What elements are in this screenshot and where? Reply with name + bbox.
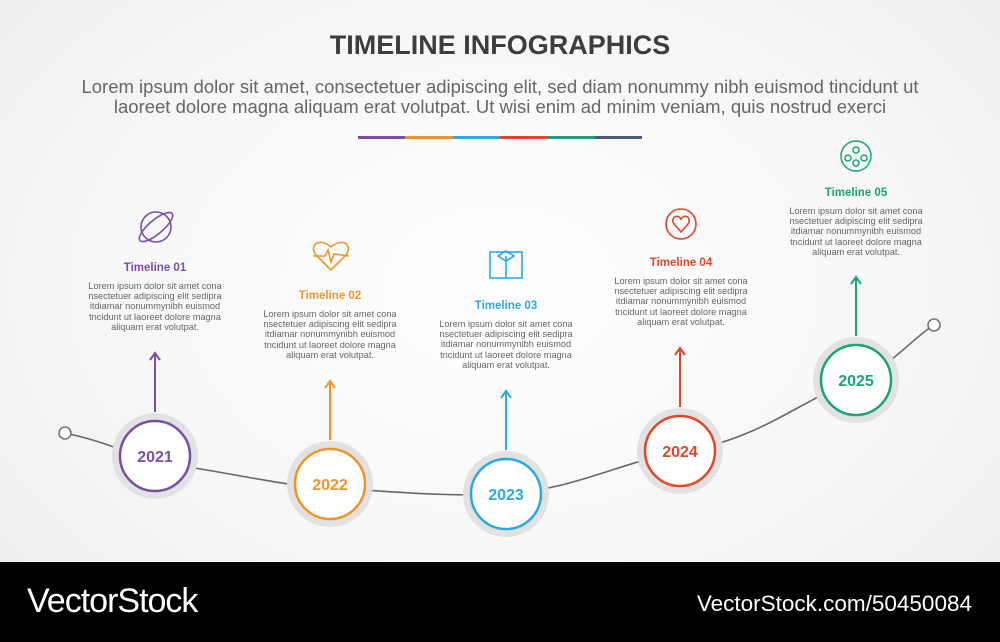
- node 2021: 2021: [137, 449, 173, 466]
- title: TIMELINE INFOGRAPHICS: [330, 30, 670, 60]
- text: timeline 01: [88, 262, 222, 332]
- text: timeline 05: aliquam erat volutpat.: [812, 247, 900, 257]
- text: timeline 01: itdiamar nonummynibh euismod: [90, 301, 220, 311]
- text: timeline 01: Lorem ipsum dolor sit amet cona: [88, 281, 222, 291]
- text: timeline 03: [439, 300, 573, 370]
- node 2021: [112, 353, 198, 499]
- text: timeline 04: Lorem ipsum dolor sit amet cona: [614, 276, 748, 286]
- text: timeline 05: [789, 187, 923, 257]
- text: timeline 03: Lorem ipsum dolor sit amet cona: [439, 319, 573, 329]
- text: timeline 03: nsectetuer adipiscing elit sedipra: [439, 329, 573, 339]
- text: timeline 03: itdiamar nonummynibh euismod: [441, 339, 571, 349]
- icon: heart in circle: [666, 209, 696, 239]
- footer band: VectorStock.com/50450084: [697, 591, 972, 616]
- text: timeline 05: tncidunt ut laoreet dolore magna: [790, 237, 922, 247]
- text: timeline 05: Timeline 05: [825, 187, 887, 199]
- text: timeline 02: nsectetuer adipiscing elit sedipra: [263, 319, 397, 329]
- node 2024: [637, 348, 723, 494]
- text: timeline 03: Timeline 03: [475, 300, 537, 312]
- icon: heart: [313, 242, 349, 270]
- text: timeline 02: aliquam erat volutpat.: [286, 350, 374, 360]
- node 2025: 2025: [838, 373, 874, 390]
- text: timeline 02: Timeline 02: [299, 290, 361, 302]
- color bar: [358, 136, 642, 139]
- text: timeline 04: aliquam erat volutpat.: [637, 317, 725, 327]
- node 2023: 2023: [488, 487, 524, 504]
- text: timeline 02: Lorem ipsum dolor sit amet cona: [263, 309, 397, 319]
- icon: globe: [135, 208, 177, 246]
- subtitle: [81, 76, 919, 117]
- text: timeline 04: [614, 257, 748, 327]
- text: timeline 01: Timeline 01: [124, 262, 186, 274]
- text: timeline 01: tncidunt ut laoreet dolore magna: [89, 312, 221, 322]
- text: timeline 02: itdiamar nonummynibh euismod: [265, 329, 395, 339]
- text: timeline 01: nsectetuer adipiscing elit sedipra: [88, 291, 222, 301]
- footer band: [0, 562, 1000, 642]
- text: timeline 05: itdiamar nonummynibh euismod: [791, 226, 921, 236]
- text: timeline 04: Timeline 04: [650, 257, 712, 269]
- text: timeline 04: nsectetuer adipiscing elit sedipra: [614, 286, 748, 296]
- node 2022: [287, 381, 373, 527]
- node 2023: [463, 391, 549, 537]
- text: timeline 03: aliquam erat volutpat.: [462, 360, 550, 370]
- text: timeline 04: itdiamar nonummynibh euismod: [616, 296, 746, 306]
- subtitle: Lorem ipsum dolor sit amet, consectetuer adipiscing elit, sed diam nonummy nibh euismod tincidunt ut: [81, 76, 919, 97]
- icon: people cycle: [841, 141, 871, 171]
- icon: book: [490, 251, 522, 278]
- footer band: VectorStock: [27, 582, 197, 620]
- subtitle: laoreet dolore magna aliquam erat volutpat. Ut wisi enim ad minim veniam, quis nostrud exerci: [114, 96, 886, 117]
- node 2022: 2022: [312, 477, 348, 494]
- text: timeline 02: tncidunt ut laoreet dolore magna: [264, 340, 396, 350]
- text: timeline 03: tncidunt ut laoreet dolore magna: [440, 350, 572, 360]
- text: timeline 05: Lorem ipsum dolor sit amet cona: [789, 206, 923, 216]
- text: timeline 02: [263, 290, 397, 360]
- node 2025: [813, 277, 899, 423]
- text: timeline 01: aliquam erat volutpat.: [111, 322, 199, 332]
- node 2024: 2024: [662, 444, 698, 461]
- text: timeline 04: tncidunt ut laoreet dolore magna: [615, 307, 747, 317]
- text: timeline 05: nsectetuer adipiscing elit sedipra: [789, 216, 923, 226]
